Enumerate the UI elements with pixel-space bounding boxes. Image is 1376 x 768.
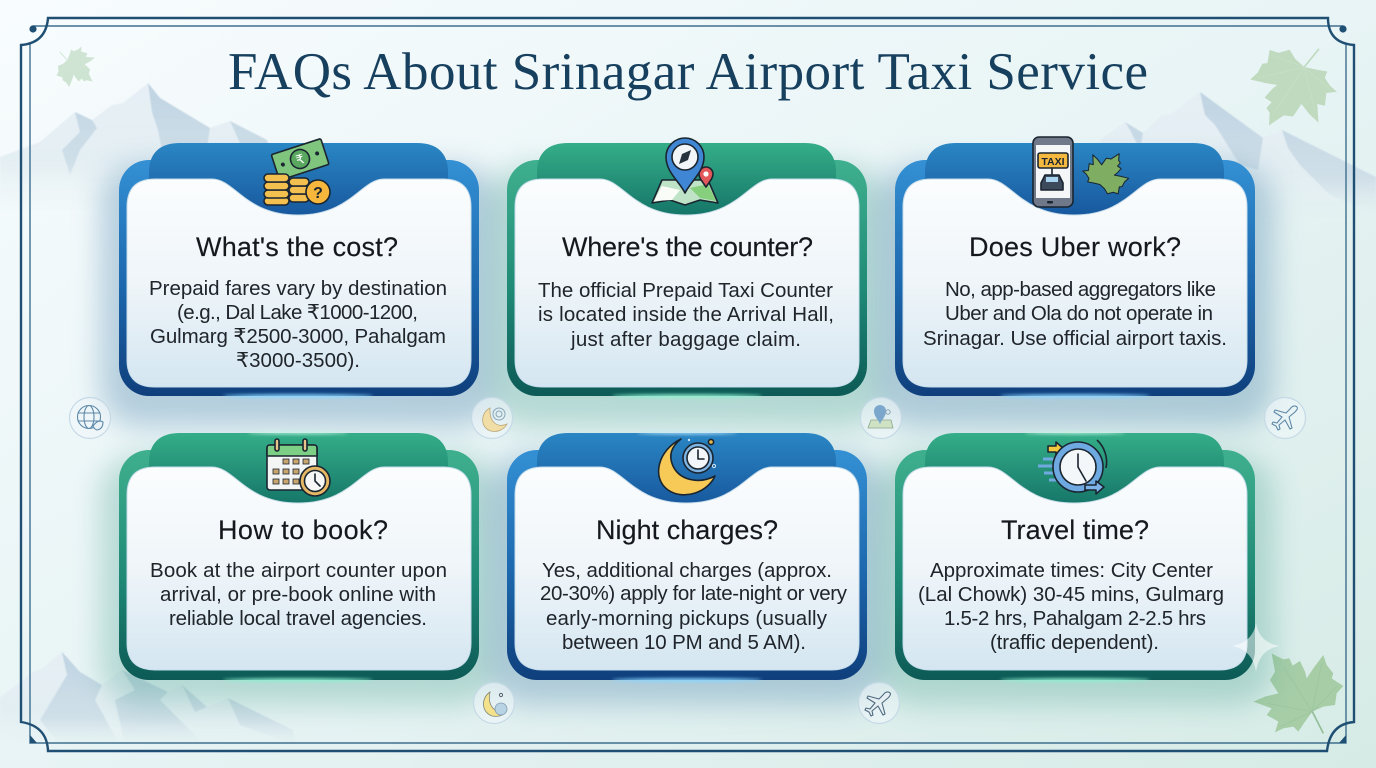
- leaf: bottom right: [1253, 653, 1343, 733]
- card frame: [507, 143, 867, 396]
- body text: [540, 559, 848, 654]
- badge: moon and clock: [474, 682, 514, 724]
- icon: taxi app on phone with leaf: [1033, 137, 1133, 207]
- panel: What's the cost?: [119, 139, 479, 396]
- panel: How to book?: [119, 433, 479, 680]
- body text: Approximate times: City Center: [930, 559, 1213, 582]
- mountains: bottom left: [0, 652, 300, 748]
- card frame: [507, 433, 867, 680]
- body text: [150, 559, 447, 630]
- card frame: [119, 433, 479, 680]
- body text: 1.5-2 hrs, Pahalgam 2-2.5 hrs: [944, 607, 1206, 630]
- body text: (traffic dependent).: [990, 631, 1159, 654]
- card frame: [119, 143, 479, 396]
- badge: globe: [70, 398, 110, 438]
- body text: [918, 559, 1224, 654]
- card frame: [895, 433, 1255, 680]
- body text: 20-30%) apply for late-night or very: [540, 582, 848, 605]
- body text: The official Prepaid Taxi Counter: [538, 279, 833, 302]
- body text: Book at the airport counter upon: [150, 559, 447, 582]
- body text: No, app-based aggregators like: [945, 278, 1216, 301]
- badge: airplane: [858, 682, 900, 724]
- leaf: top left: [51, 43, 101, 90]
- body text: [149, 277, 447, 372]
- heading: Travel time?: [1001, 515, 1149, 545]
- body text: between 10 PM and 5 AM).: [562, 631, 806, 654]
- mountains: top left: [0, 83, 300, 215]
- body text: is located inside the Arrival Hall,: [538, 303, 834, 326]
- icon: crescent moon with clock: [659, 439, 716, 495]
- title: FAQs About Srinagar Airport Taxi Service: [228, 43, 1148, 101]
- body text: (e.g., Dal Lake ₹1000-1200,: [177, 301, 418, 324]
- body text: (Lal Chowk) 30-45 mins, Gulmarg: [918, 583, 1224, 606]
- card edge light glints: [223, 394, 1150, 682]
- mountains: top right: [1100, 92, 1376, 225]
- body text: Gulmarg ₹2500-3000, Pahalgam: [150, 325, 446, 348]
- heading: What's the cost?: [196, 232, 398, 262]
- heading: How to book?: [218, 515, 388, 545]
- badge: map pin: [860, 398, 902, 438]
- badge: airplane: [1264, 398, 1306, 438]
- icon: money and coins: ?: [313, 185, 323, 202]
- body text: Yes, additional charges (approx.: [542, 559, 832, 582]
- icon: calendar with clock: [267, 439, 330, 496]
- icon: map with location pin: [652, 138, 718, 205]
- body text: arrival, or pre-book online with: [160, 583, 436, 606]
- sparkle: [1232, 623, 1279, 672]
- panel: Does Uber work?: [895, 137, 1255, 396]
- heading: Night charges?: [596, 515, 778, 545]
- panel: Travel time?: [895, 433, 1255, 680]
- body text: Prepaid fares vary by destination: [149, 277, 447, 300]
- panel: Night charges?: [507, 433, 867, 680]
- icon: stopwatch with speed lines: [1038, 440, 1107, 494]
- body text: early-morning pickups (usually: [546, 607, 828, 630]
- leaf: top right: [1241, 31, 1346, 142]
- badge: moon with clock: [472, 398, 512, 438]
- icon: money and coins: [264, 139, 330, 205]
- body text: Uber and Ola do not operate in: [945, 302, 1213, 325]
- body text: ₹3000-3500).: [236, 349, 360, 372]
- body text: reliable local travel agencies.: [169, 607, 427, 630]
- body text: Srinagar. Use official airport taxis.: [923, 327, 1227, 350]
- body text: [538, 279, 834, 351]
- heading: Does Uber work?: [969, 232, 1181, 262]
- card frame: [895, 143, 1255, 396]
- heading: Where's the counter?: [562, 232, 813, 262]
- body text: [923, 278, 1227, 350]
- body text: just after baggage claim.: [570, 328, 801, 351]
- icon: money and coins: ₹: [294, 152, 307, 169]
- panel: Where's the counter?: [507, 138, 867, 396]
- card shadows and glow: [100, 165, 1274, 705]
- icon: taxi app on phone with leaf: TAXI: [1041, 156, 1065, 168]
